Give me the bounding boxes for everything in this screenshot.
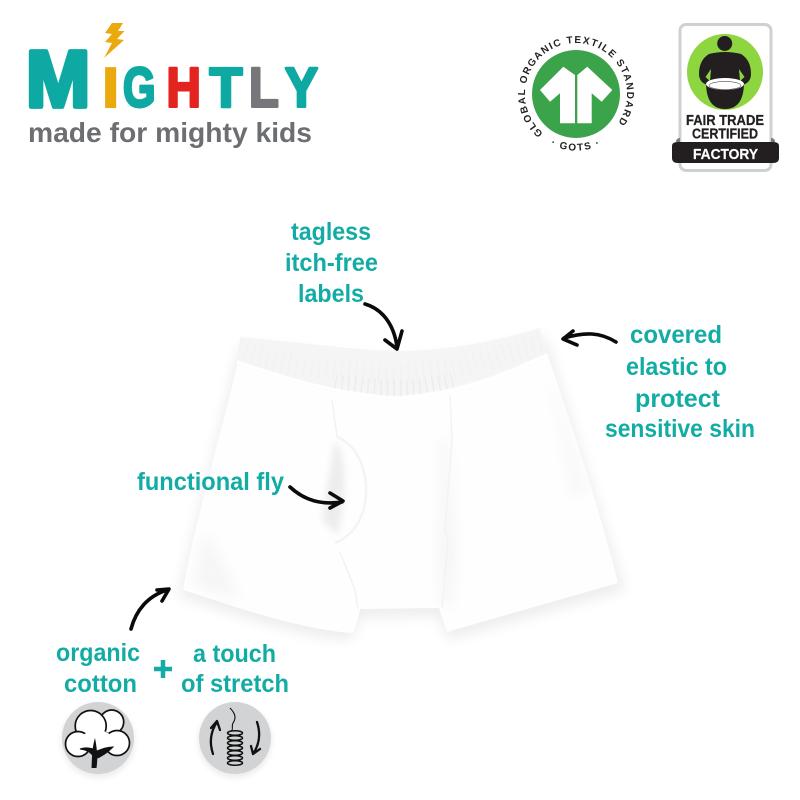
label: a touch of stretch: a touch — [193, 640, 276, 668]
logo wordmark: H — [166, 56, 201, 118]
shorts body — [183, 328, 618, 633]
label text — [285, 218, 378, 308]
shorts shading — [206, 563, 220, 583]
label: a touch of stretch — [181, 640, 289, 698]
fly seam left — [332, 400, 358, 609]
fly opening shadow — [322, 446, 344, 532]
arrow — [131, 589, 169, 629]
logo tagline: made for mighty kids — [28, 117, 312, 148]
boxer shorts — [178, 326, 625, 640]
label text: sensitive skin — [605, 415, 755, 443]
label text: protect — [635, 385, 721, 413]
fly panel — [335, 437, 366, 543]
logo wordmark: L — [249, 58, 279, 119]
logo wordmark: T — [210, 56, 242, 119]
logo wordmark: G — [123, 57, 155, 119]
callout: covered elastic — [563, 321, 755, 443]
logo wordmark: Y — [285, 57, 318, 119]
icon: cotton boll — [61, 702, 135, 778]
label: a touch of stretch: of stretch — [181, 670, 289, 698]
GOTS green circle — [532, 50, 620, 138]
label text — [605, 321, 755, 443]
label text: tagless — [291, 218, 371, 246]
badge wordmark: FAIR TRADE — [686, 113, 764, 129]
badge figure — [699, 36, 751, 109]
icon: elastic spring — [198, 702, 272, 778]
shorts waistband — [235, 326, 550, 398]
GOTS bottom text: · GOTS · — [552, 141, 598, 151]
logo wordmark: I — [100, 55, 121, 121]
badge: Fair Trade Certified — [672, 24, 779, 170]
logo: Mightly — [26, 23, 318, 148]
GOTS ring text: GLOBAL ORGANIC TEXTILE STANDARD — [518, 36, 634, 137]
arrow — [365, 304, 402, 349]
badge: GOTS — [518, 36, 634, 151]
label text: labels — [298, 280, 364, 308]
arrow — [290, 487, 343, 508]
badge frame — [680, 24, 771, 170]
logo lightning bolt — [104, 23, 124, 58]
label: organic cotton: organic — [56, 639, 140, 667]
banner text: FACTORY — [693, 146, 758, 163]
label text: functional fly — [137, 468, 284, 496]
badge green circle — [687, 34, 763, 110]
callout: tagless labels — [285, 218, 402, 349]
label: organic cotton: cotton — [64, 670, 137, 698]
label text: elastic to — [626, 353, 727, 381]
arrow — [563, 331, 616, 345]
waistband elastic ribs — [335, 380, 457, 388]
badge: Fair Trade Certified: CERTIFIED — [692, 126, 758, 142]
plus sign — [154, 660, 172, 678]
GOTS shirt icon — [540, 67, 612, 123]
badge banner — [672, 142, 779, 163]
label text: covered — [630, 321, 722, 349]
fly seam right — [442, 395, 452, 608]
callout: functional fly — [137, 468, 343, 508]
label: organic cotton — [56, 639, 140, 698]
shorts shadow — [178, 336, 625, 640]
logo wordmark — [26, 34, 318, 124]
banner curl tabs — [676, 138, 775, 142]
label text: itch-free — [285, 249, 378, 277]
waistband ribs — [238, 342, 545, 375]
callout: organic cotton plus stretch — [56, 589, 289, 778]
logo wordmark: M — [26, 34, 90, 124]
waistband stitch line — [235, 353, 552, 398]
